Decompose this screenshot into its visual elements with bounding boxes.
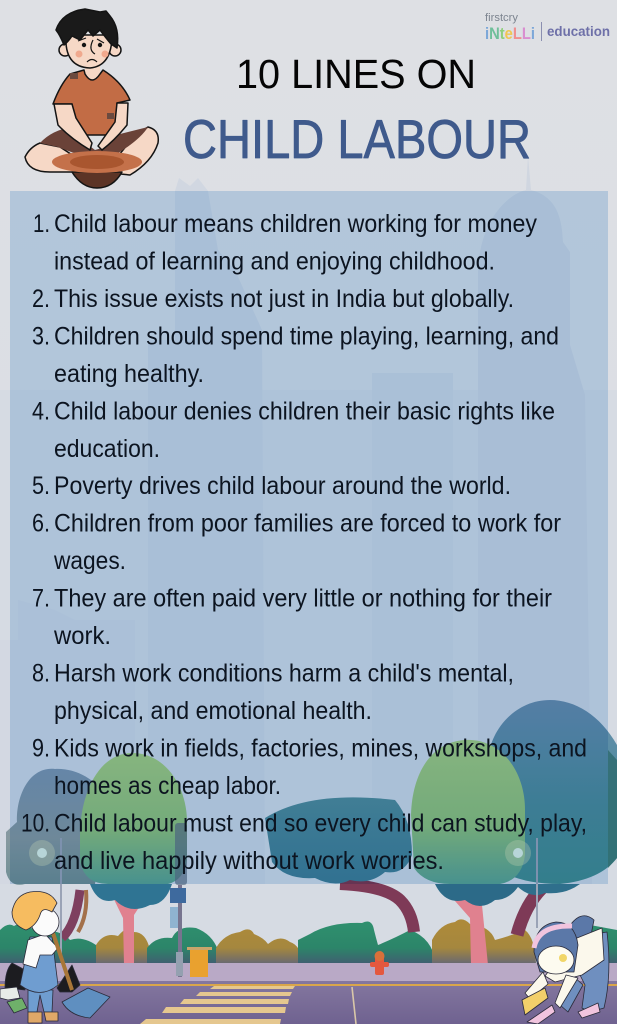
logo: firstcry intelli education <box>485 12 610 43</box>
garbage bags <box>5 963 80 992</box>
item 1: 1. <box>33 210 50 238</box>
item 3: Children should spend time playing, learning, and <box>54 322 559 350</box>
item 6: Children from poor families are forced to work for <box>54 510 561 538</box>
numbered list <box>21 210 587 875</box>
item 5: Poverty drives child labour around the world. <box>54 472 511 500</box>
item 10: and live happily without work worries. <box>54 847 444 875</box>
item 8: Harsh work conditions harm a child's mental, <box>54 660 514 688</box>
arms <box>54 104 92 150</box>
neck <box>85 62 100 81</box>
street scene <box>0 700 617 1024</box>
trash bin <box>187 947 212 977</box>
ears <box>59 44 71 56</box>
item 9: Kids work in fields, factories, mines, workshops, and <box>54 734 587 762</box>
item 4: education. <box>54 435 160 463</box>
tree: centre-left green crown and pink trunk <box>80 753 187 973</box>
item 5: 5. <box>32 472 50 500</box>
item 3: eating healthy. <box>54 360 204 388</box>
scattered trash <box>0 987 20 1000</box>
shoe <box>578 1003 600 1018</box>
green wrapper <box>7 998 27 1013</box>
crossed legs <box>25 127 158 175</box>
centre road mark <box>352 987 356 1024</box>
cheek <box>559 954 567 962</box>
item 9: 9. <box>32 734 50 762</box>
tree: centre-right teal crown with maroon trunk <box>265 797 414 932</box>
item 4: Child labour denies children their basic rights like <box>54 398 555 426</box>
title: child labour: CHILD LABOUR <box>183 108 531 170</box>
item 6: wages. <box>53 547 126 575</box>
shoes <box>28 1012 58 1023</box>
hair <box>56 9 118 48</box>
kerb line <box>0 984 617 986</box>
translucent text panel <box>10 191 608 884</box>
title: 10 lines on: 10 LINES ON <box>236 51 476 97</box>
logo: firstcry intelli education: education <box>547 24 610 39</box>
face <box>538 946 574 974</box>
illustration: boy sweeping with broom <box>0 891 110 1023</box>
bowl rim <box>52 151 142 173</box>
item 1: instead of learning and enjoying childhood. <box>54 248 495 276</box>
traffic light <box>170 823 187 977</box>
second leg <box>560 975 583 1012</box>
item 6 <box>32 510 561 575</box>
item 2: 2. <box>32 285 50 313</box>
shirt <box>23 934 58 968</box>
shorts <box>40 127 148 158</box>
shirt <box>545 928 604 982</box>
item 3 <box>32 322 559 388</box>
item 8: physical, and emotional health. <box>54 697 372 725</box>
broom handle <box>53 933 72 990</box>
sidewalk <box>0 963 617 981</box>
shirt <box>53 70 130 135</box>
item 8: 8. <box>32 660 50 688</box>
item 7: They are often paid very little or nothing for their <box>54 584 552 612</box>
eyes and mouth <box>78 38 104 62</box>
hair bun <box>567 916 594 940</box>
item 10: Child labour must end so every child can study, play, <box>54 810 587 838</box>
tree: right big dark crown with trunk <box>480 700 617 935</box>
bowl underside <box>72 172 122 188</box>
dust pan <box>527 1005 555 1024</box>
item 2: This issue exists not just in India but globally. <box>54 285 514 313</box>
crosswalk <box>140 986 295 1024</box>
jeans <box>575 932 609 1012</box>
bowl inner <box>70 155 124 169</box>
hair front back <box>534 922 578 972</box>
item 6: 6. <box>32 510 50 538</box>
item 10 <box>21 810 587 875</box>
item 3: 3. <box>32 322 50 350</box>
logo: firstcry intelli education: iNteLLi <box>485 24 535 43</box>
item 7: work. <box>53 622 111 650</box>
item 1: Child labour means children working for money <box>54 210 537 238</box>
city skyline silhouette <box>0 156 617 964</box>
tree: left dark crown <box>6 769 110 938</box>
item 1 <box>33 210 537 276</box>
shirt patches <box>70 73 78 79</box>
tree: right green crown and pink trunk <box>411 740 525 973</box>
headband <box>534 926 572 948</box>
brush <box>522 988 548 1015</box>
item 10: 10. <box>21 810 50 838</box>
item 7: 7. <box>32 584 50 612</box>
orange hair <box>12 891 57 930</box>
illustration: sad boy with bowl <box>25 9 158 188</box>
road <box>0 981 617 1024</box>
fire hydrant <box>370 951 389 975</box>
item 8 <box>32 660 514 725</box>
legs <box>28 990 53 1012</box>
item 9 <box>32 734 587 800</box>
item 4: 4. <box>32 398 50 426</box>
bushes <box>0 919 617 963</box>
overalls <box>20 937 58 992</box>
item 7 <box>32 584 552 650</box>
face <box>66 35 112 68</box>
item 9: homes as cheap labor. <box>54 772 281 800</box>
logo: firstcry intelli education: firstcry <box>485 12 519 24</box>
item 4 <box>32 398 555 463</box>
illustration: girl sweeping with brush <box>522 916 609 1024</box>
dustpan <box>62 988 110 1018</box>
blush <box>76 50 108 58</box>
arms <box>525 972 578 1008</box>
street lamps <box>29 838 538 960</box>
face <box>31 908 59 936</box>
